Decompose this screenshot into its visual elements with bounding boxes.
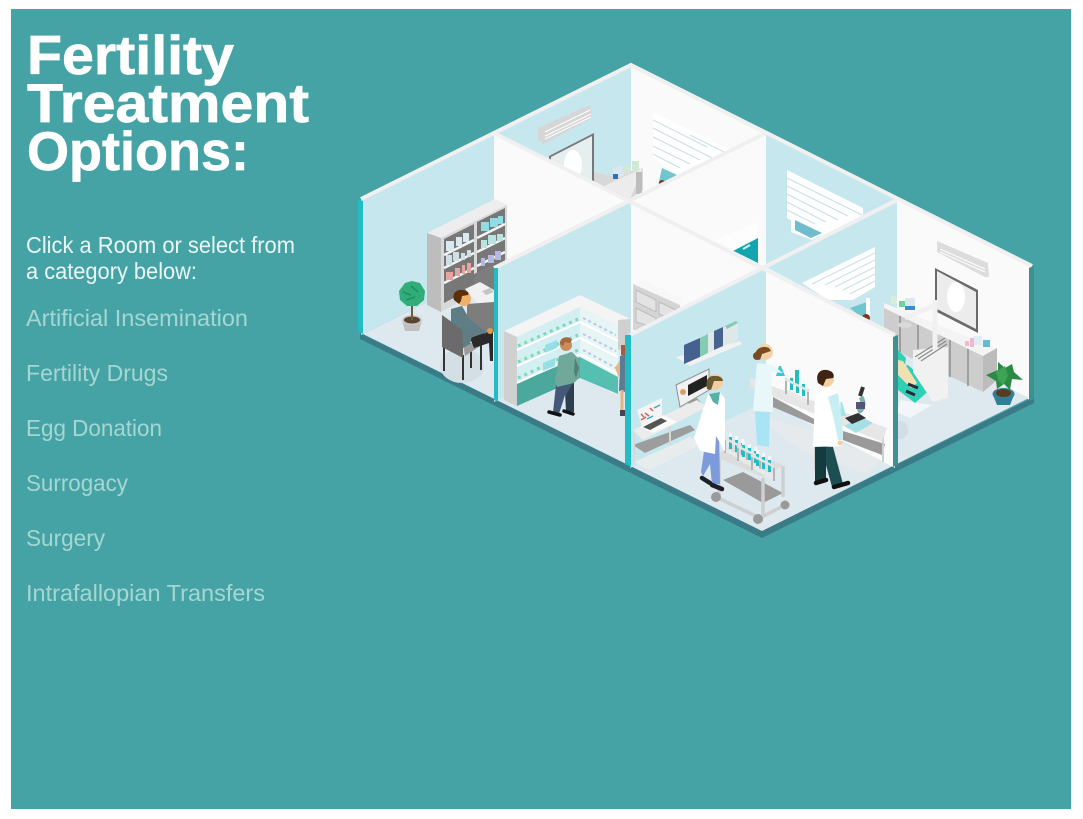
seated man on chair [440, 290, 493, 383]
lab cart [711, 445, 790, 524]
wall: right room left side (blue) [766, 200, 897, 404]
title [27, 24, 309, 182]
air conditioner right [937, 241, 989, 277]
instructions text: a category below: [26, 258, 197, 284]
category list: Artificial Insemination [26, 305, 248, 331]
medicine shelf [427, 199, 507, 312]
floor base shadow [360, 333, 1034, 538]
room: top back furnishings [538, 105, 730, 199]
desk with monitor [465, 264, 494, 343]
room: right furnishings [884, 241, 1023, 439]
category list: Fertility Drugs [26, 360, 168, 386]
egg monitor [549, 133, 594, 192]
microscope [844, 387, 873, 433]
flask and tube [776, 366, 846, 416]
wall window right room [802, 247, 875, 322]
cart test tubes [724, 433, 777, 481]
instructions text [26, 232, 295, 284]
wall: lab right (white) [766, 267, 895, 468]
room: pharmacy [504, 295, 630, 416]
wall: pharmacy right (white) [631, 200, 766, 404]
category list: Egg Donation [26, 415, 162, 441]
wall: top room divider [631, 133, 766, 336]
category list [26, 305, 265, 606]
wall: back divider of left room [494, 133, 631, 336]
cabinet [594, 161, 643, 199]
left desk [633, 400, 707, 470]
title: Fertility [27, 24, 234, 86]
window with blinds [653, 112, 730, 186]
floor [363, 200, 1029, 531]
instructions text: Click a Room or select from [26, 232, 295, 258]
woman in lab [753, 344, 783, 447]
man with microscope [813, 370, 848, 487]
plant left [399, 281, 425, 331]
pharmacy corner shelves [504, 295, 630, 406]
dental chair and patient [892, 300, 948, 439]
dental cabinets [884, 296, 997, 392]
title: Options: [27, 120, 249, 182]
laptop [637, 398, 677, 433]
category list: Surrogacy [26, 470, 128, 496]
title: Treatment [27, 72, 309, 134]
plant right [986, 362, 1023, 405]
wall monitor [676, 369, 709, 408]
man in pharmacy [549, 337, 580, 415]
wall end caps [358, 199, 1034, 467]
teal door fragment [715, 222, 758, 264]
book shelf [676, 321, 742, 366]
room: left office [399, 199, 507, 383]
wall tops [361, 65, 1032, 335]
wall: pharmacy room back (blue) [494, 200, 631, 402]
test tube rack on bench [785, 374, 811, 405]
air conditioner [538, 105, 592, 144]
back walls [361, 65, 1030, 400]
filing cabinets [633, 280, 682, 330]
woman in pharmacy [615, 345, 626, 416]
room: laboratory [633, 321, 887, 524]
category list: Surgery [26, 525, 105, 551]
egg monitor right [935, 268, 978, 333]
wall: lab left (blue) [630, 267, 766, 468]
back lab bench [750, 378, 887, 474]
window: centre room back wall [787, 170, 863, 240]
isometric clinic illustration [358, 65, 1034, 538]
category list: Intrafallopian Transfers [26, 580, 265, 606]
doctor with blue trousers [694, 374, 725, 489]
